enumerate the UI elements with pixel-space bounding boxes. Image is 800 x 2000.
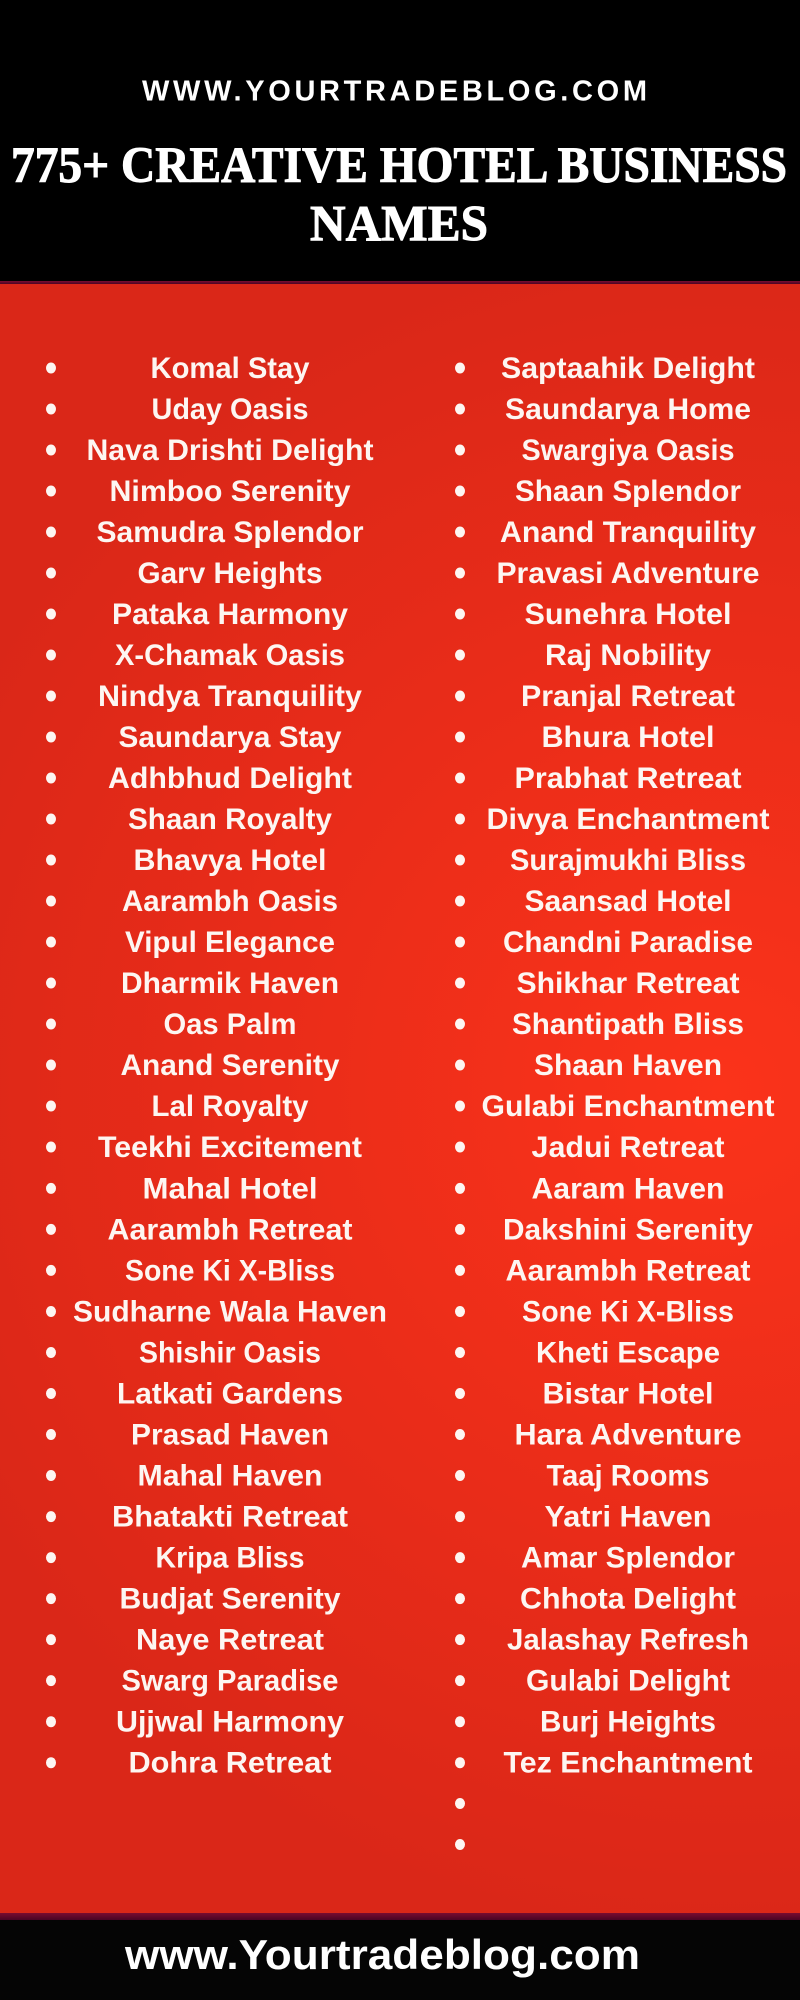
- left column names: Anand Serenity: [120, 1049, 340, 1082]
- right column names: Saptaahik Delight: [501, 352, 755, 385]
- left column names: Swarg Paradise: [122, 1665, 338, 1698]
- right column names: Shaan Splendor: [515, 475, 741, 508]
- right column names: Saansad Hotel: [524, 885, 732, 918]
- left column names: Sudharne Wala Haven: [73, 1296, 387, 1328]
- right column names: Swargiya Oasis: [522, 434, 734, 467]
- right column names: [482, 352, 775, 1780]
- right column names: Hara Adventure: [514, 1418, 742, 1452]
- left column names: Nimboo Serenity: [110, 475, 351, 508]
- left column names: Mahal Hotel: [142, 1172, 318, 1205]
- right column names: Pravasi Adventure: [496, 557, 760, 590]
- website label: WWW.YOURTRADEBLOG.COM: [142, 76, 647, 108]
- left column bullets: [46, 362, 56, 1768]
- left column names: Komal Stay: [150, 352, 310, 385]
- left column names: Teekhi Excitement: [98, 1131, 362, 1164]
- right column names: Aarambh Retreat: [506, 1254, 751, 1287]
- right column names: Anand Tranquility: [500, 516, 756, 549]
- left column names: Garv Heights: [138, 557, 322, 590]
- right column names: Bistar Hotel: [542, 1378, 714, 1410]
- right column names: Surajmukhi Bliss: [510, 844, 746, 877]
- left column names: X-Chamak Oasis: [115, 639, 345, 672]
- title: NAMES: [310, 196, 488, 252]
- right column names: Jadui Retreat: [532, 1131, 724, 1164]
- left column names: Aarambh Oasis: [122, 885, 338, 918]
- right column names: Shantipath Bliss: [512, 1008, 744, 1041]
- header panel: [0, 0, 800, 281]
- right column names: Bhura Hotel: [542, 721, 714, 754]
- footer panel: [0, 1920, 800, 2000]
- left column names: Shaan Royalty: [128, 803, 332, 836]
- right column names: Shikhar Retreat: [516, 967, 740, 1000]
- right column names: Kheti Escape: [536, 1336, 720, 1370]
- left column names: Adhbhud Delight: [108, 762, 352, 795]
- right column names: Chandni Paradise: [503, 926, 753, 959]
- right column names: Burj Heights: [540, 1706, 716, 1739]
- left column names: Budjat Serenity: [120, 1583, 341, 1616]
- right column names: Taaj Rooms: [546, 1460, 710, 1492]
- right column names: Prabhat Retreat: [514, 762, 742, 795]
- right column names: Amar Splendor: [521, 1542, 735, 1575]
- left column names: Aarambh Retreat: [108, 1213, 353, 1246]
- left column names: Saundarya Stay: [118, 721, 342, 754]
- left column names: Samudra Splendor: [96, 516, 364, 549]
- right column names: Chhota Delight: [520, 1583, 736, 1616]
- right column names: Pranjal Retreat: [521, 680, 735, 713]
- right column bullets: [455, 362, 465, 1850]
- left column names: Shishir Oasis: [139, 1336, 321, 1370]
- right column names: Aaram Haven: [532, 1172, 724, 1205]
- left column names: Uday Oasis: [152, 393, 308, 426]
- right column names: Yatri Haven: [544, 1501, 712, 1534]
- left column names: Sone Ki X-Bliss: [125, 1254, 335, 1287]
- right column names: Gulabi Delight: [526, 1665, 730, 1698]
- left column names: Prasad Haven: [131, 1418, 329, 1452]
- right column names: Sone Ki X-Bliss: [522, 1296, 734, 1328]
- left column names: Ujjwal Harmony: [116, 1706, 344, 1739]
- left column names: Dharmik Haven: [121, 967, 339, 1000]
- title: [11, 138, 787, 252]
- left column names: Nindya Tranquility: [98, 680, 362, 713]
- right column names: Divya Enchantment: [486, 803, 770, 836]
- left column names: Dohra Retreat: [128, 1747, 332, 1780]
- right column names: Jalashay Refresh: [507, 1624, 749, 1657]
- right column names: Dakshini Serenity: [503, 1213, 753, 1246]
- left column names: Lal Royalty: [152, 1090, 309, 1123]
- left column names: Nava Drishti Delight: [86, 434, 374, 467]
- left column names: [73, 352, 387, 1780]
- left column names: Naye Retreat: [136, 1624, 324, 1657]
- left column names: Bhavya Hotel: [134, 844, 326, 877]
- right column names: Sunehra Hotel: [524, 598, 732, 631]
- left column names: Latkati Gardens: [117, 1378, 343, 1410]
- right column names: Shaan Haven: [534, 1049, 722, 1082]
- left column names: Kripa Bliss: [156, 1542, 304, 1575]
- left column names: Mahal Haven: [138, 1460, 322, 1492]
- left column names: Vipul Elegance: [125, 926, 335, 959]
- left column names: Pataka Harmony: [112, 598, 348, 631]
- left column names: Oas Palm: [164, 1008, 296, 1041]
- footer website text: www.Yourtradeblog.com: [124, 1931, 640, 1978]
- right column names: Raj Nobility: [545, 639, 711, 672]
- footer divider strip: [0, 1913, 800, 1920]
- right column names: Saundarya Home: [505, 393, 751, 426]
- left column names: Bhatakti Retreat: [112, 1501, 348, 1534]
- right column names: Gulabi Enchantment: [482, 1090, 775, 1123]
- right column names: Tez Enchantment: [504, 1747, 753, 1780]
- header divider strip: [0, 281, 800, 284]
